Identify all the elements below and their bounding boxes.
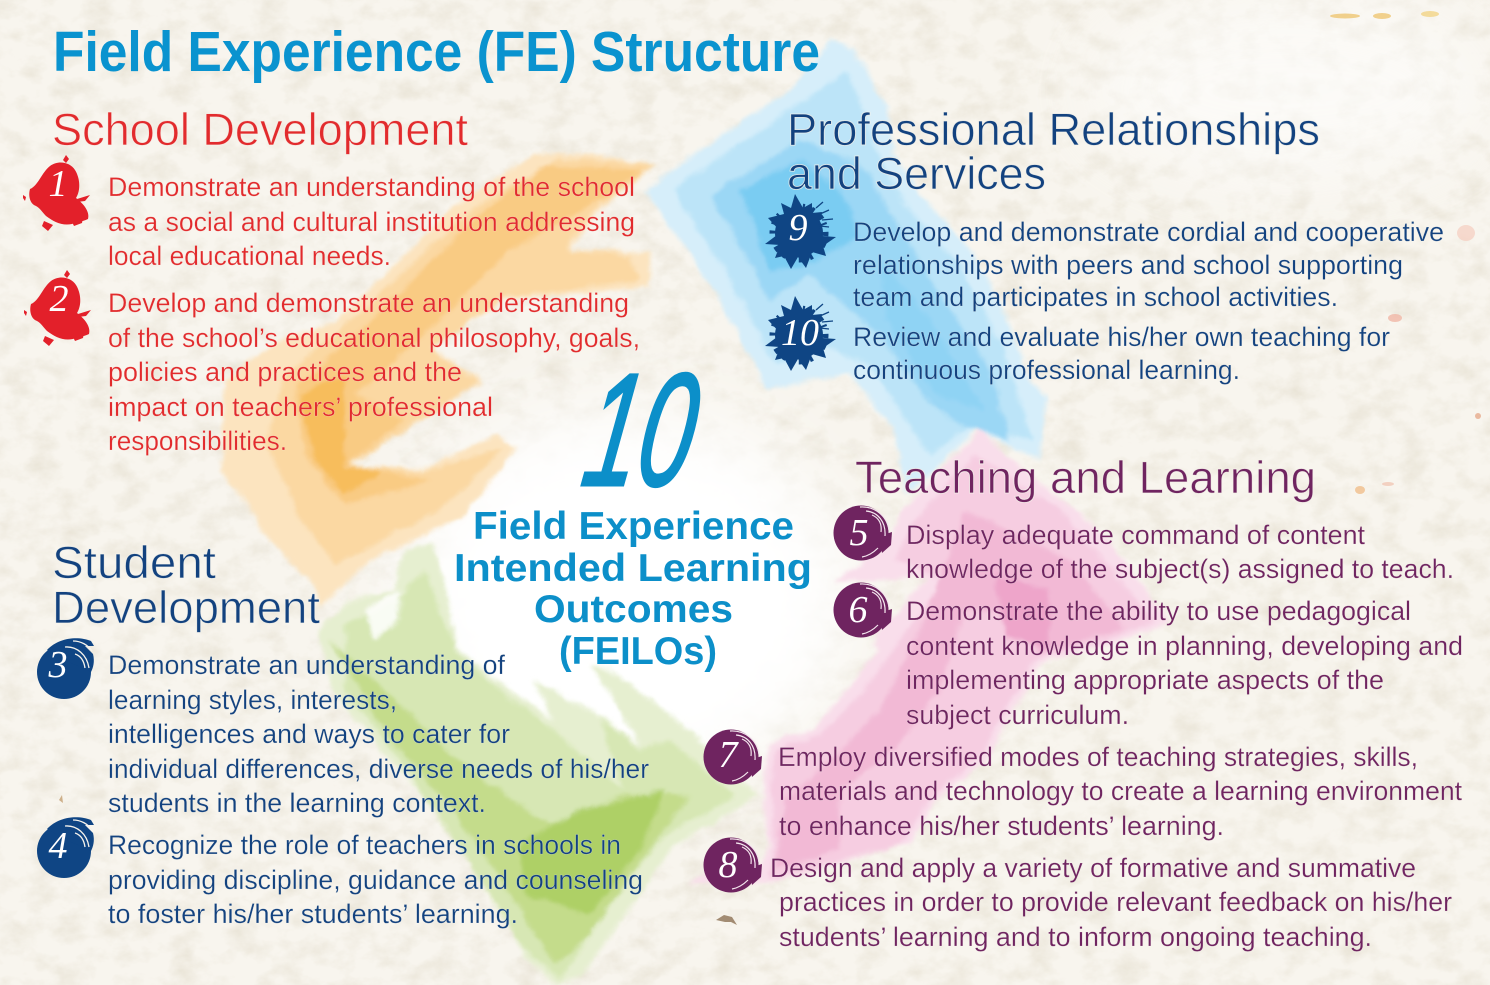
icon: red splat 1 [23, 155, 90, 231]
text: outcome 1: local educational needs. [108, 241, 391, 271]
text: outcome 3: individual differences, diverse needs of his/her [108, 754, 649, 784]
text: outcome 6: content knowledge in planning, developing and [906, 631, 1463, 661]
text: outcome 7 [778, 742, 1463, 841]
text: outcome 2: impact on teachers’ professional [108, 392, 493, 422]
icon: navy brush circle 4 [37, 817, 94, 878]
arrow: green, student development [317, 543, 757, 985]
text: outcome 3 [108, 650, 649, 818]
icon: purple brush circle 5: 5 [850, 512, 868, 554]
text: outcome 3: learning styles, interests, [108, 685, 397, 715]
text: outcome 1: as a social and cultural institution addressing [108, 207, 635, 237]
text: outcome 8 [770, 853, 1452, 952]
arrow: orange, school development [222, 153, 657, 607]
heading: professional relationships [787, 104, 1320, 199]
text: outcome 8: practices in order to provide relevant feedback on his/her [779, 887, 1452, 917]
icon: navy ink burst 9: 9 [788, 207, 808, 249]
text: outcome 4 [108, 830, 643, 929]
icon: purple brush circle 8 [704, 838, 762, 892]
panel: student development [37, 537, 649, 929]
icon: purple brush circle 7: 7 [718, 734, 740, 776]
text: outcome 7: to enhance his/her students’ learning. [779, 811, 1224, 841]
icon: purple brush circle 6 [834, 582, 892, 638]
big numeral 10: 10 [573, 341, 710, 520]
text: outcome 2: policies and practices and the [108, 357, 462, 387]
panel: teaching and learning [704, 452, 1463, 952]
heading: professional relationships: Professional Relationships [787, 104, 1320, 155]
text: outcome 6 [906, 596, 1463, 730]
text: outcome 7: materials and technology to create a learning environment [779, 776, 1463, 806]
text: outcome 9 [853, 217, 1444, 312]
text: outcome 1 [108, 172, 635, 271]
text: outcome 9: Develop and demonstrate cordial and cooperative [853, 217, 1444, 247]
text: outcome 3: intelligences and ways to cater for [108, 719, 510, 749]
centre label: 10 FEILOs [454, 341, 812, 673]
icon: navy ink burst 10 [765, 296, 836, 371]
arrow: pink, teaching and learning [687, 430, 1170, 883]
text: outcome 5: Display adequate command of content [906, 520, 1366, 550]
text: outcome 6: subject curriculum. [906, 700, 1129, 730]
icon: purple brush circle 8: 8 [718, 844, 738, 886]
text: outcome 5: knowledge of the subject(s) assigned to teach. [906, 554, 1454, 584]
text: outcome 2: responsibilities. [108, 426, 287, 456]
text: outcome 10: continuous professional learning. [853, 355, 1240, 385]
icon: navy brush circle 3 [37, 638, 94, 699]
heading: student development: Student [52, 537, 217, 588]
text: outcome 3: students in the learning context. [108, 788, 486, 818]
text: outcome 1: Demonstrate an understanding of the school [108, 172, 635, 202]
heading: teaching and learning: Teaching and Learning [855, 452, 1316, 503]
icon: navy ink burst 9 [765, 194, 836, 269]
text: outcome 6: implementing appropriate aspects of the [906, 665, 1384, 695]
icon: red splat 1: 1 [48, 163, 68, 205]
text: outcome 2: of the school’s educational philosophy, goals, [108, 323, 640, 353]
icon: red splat 2: 2 [50, 278, 68, 320]
text: outcome 9: relationships with peers and school supporting [853, 250, 1403, 280]
icon: navy brush circle 3: 3 [48, 644, 68, 686]
arrow: blue, professional relationships [645, 40, 1047, 493]
icon: red splat 2 [24, 270, 91, 346]
text: outcome 2: Develop and demonstrate an understanding [108, 288, 629, 318]
heading: student development: Development [52, 582, 320, 633]
centre caption: Intended Learning [454, 547, 812, 590]
panel: professional relationships and services [765, 104, 1444, 385]
icon: navy brush circle 4: 4 [48, 825, 68, 867]
text: outcome 3: Demonstrate an understanding of [108, 650, 506, 680]
text: outcome 7: Employ diversified modes of teaching strategies, skills, [778, 742, 1418, 772]
text: outcome 2 [108, 288, 640, 456]
text: outcome 6: Demonstrate the ability to use pedagogical [906, 596, 1411, 626]
text: outcome 4: Recognize the role of teachers in schools in [108, 830, 621, 860]
heading: student development [52, 537, 320, 633]
icon: navy ink burst 10: 10 [781, 312, 819, 354]
icon: purple brush circle 7 [704, 730, 762, 784]
centre caption: Outcomes [534, 588, 733, 631]
centre caption: (FEILOs) [559, 630, 717, 673]
centre caption: Field Experience [473, 505, 794, 548]
panel: school development [23, 104, 640, 456]
text: outcome 4: providing discipline, guidance and counseling [108, 865, 643, 895]
heading: school development: School Development [52, 104, 468, 155]
text: outcome 9: team and participates in school activities. [853, 282, 1338, 312]
text: outcome 8: students’ learning and to inform ongoing teaching. [779, 922, 1372, 952]
text: outcome 10: Review and evaluate his/her own teaching for [853, 322, 1390, 352]
text: outcome 8: Design and apply a variety of formative and summative [770, 853, 1416, 883]
icon: purple brush circle 6: 6 [848, 589, 868, 631]
text: outcome 5 [906, 520, 1454, 584]
centre caption [454, 505, 812, 673]
text: outcome 4: to foster his/her students’ learning. [108, 899, 518, 929]
text: outcome 10 [853, 322, 1390, 385]
heading: professional relationships: and Services [787, 148, 1046, 199]
title: Field Experience (FE) Structure [53, 20, 820, 84]
swirl of four watercolour arrows [222, 40, 1170, 985]
icon: purple brush circle 5 [834, 506, 892, 560]
